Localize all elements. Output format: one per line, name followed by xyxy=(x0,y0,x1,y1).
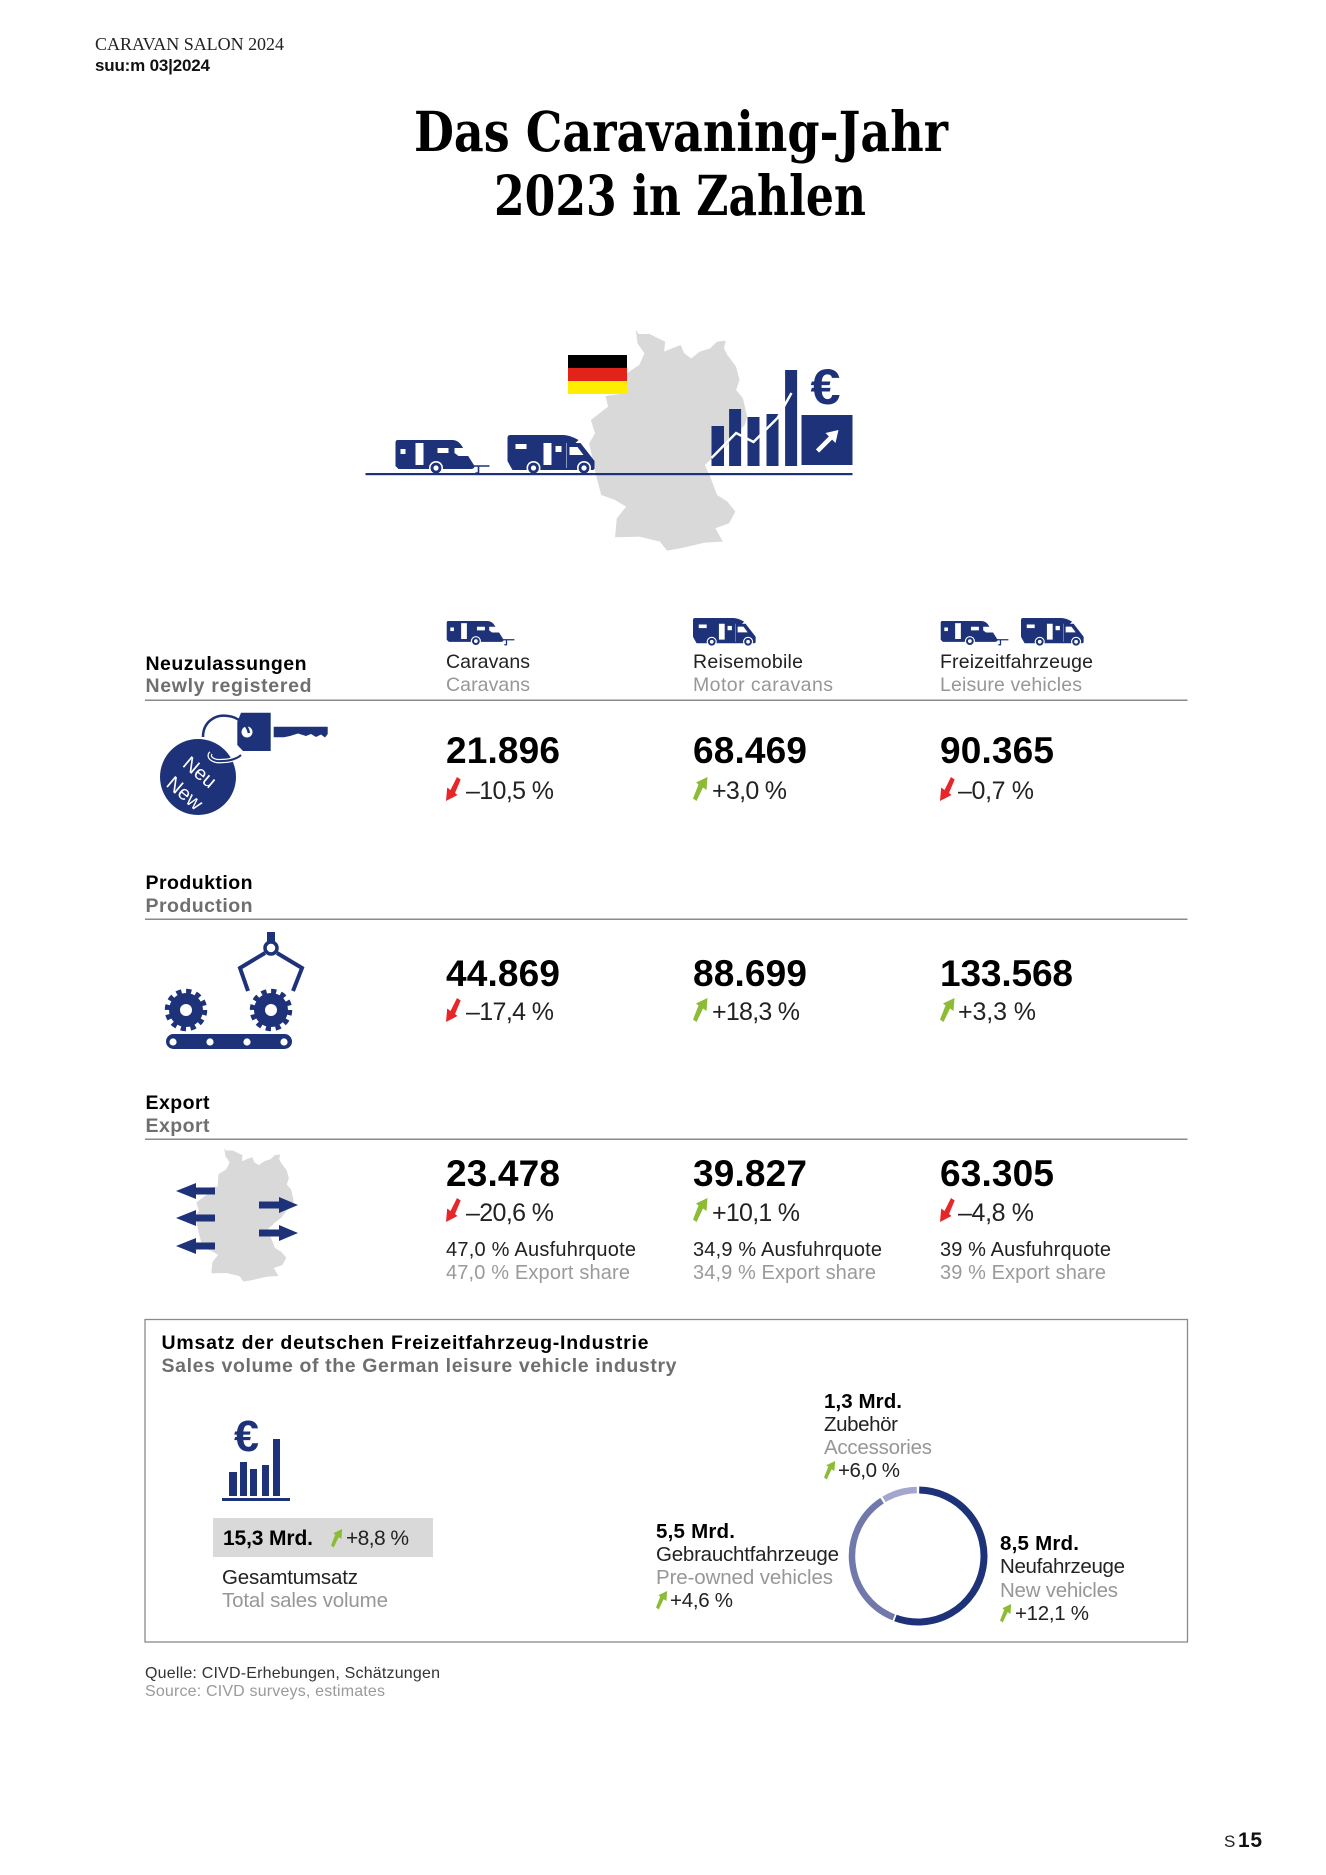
icon: production line with gears and gripper xyxy=(166,932,302,1049)
stat: motor caravans exported: 34,9 % Ausfuhrquote xyxy=(693,1239,882,1261)
stat: leisure vehicles exported: 39 % Export share xyxy=(940,1262,1106,1284)
stat: leisure vehicles exported: 63.305 xyxy=(940,1153,1054,1194)
icon: key with tag xyxy=(160,713,328,815)
label: pre-owned vehicles: 5,5 Mrd. xyxy=(656,1520,735,1543)
page number: 15 xyxy=(1238,1829,1262,1852)
donut chart xyxy=(852,1490,984,1622)
source note: Quelle: CIVD-Erhebungen, Schätzungen xyxy=(145,1665,440,1682)
stat: caravans exported: 47,0 % Ausfuhrquote xyxy=(446,1239,636,1261)
callout: total sales: 15,3 Mrd. xyxy=(223,1527,313,1550)
stat: motor caravans produced: 88.699 xyxy=(693,953,807,994)
heading: sales volume xyxy=(162,1332,677,1377)
stat: leisure vehicles exported: 39 % Ausfuhrquote xyxy=(940,1239,1111,1261)
title: Das Caravaning-Jahr xyxy=(414,99,949,164)
stat: motor caravans exported: 34,9 % Export share xyxy=(693,1262,876,1284)
column: motor caravans: Motor caravans xyxy=(693,674,833,696)
stat: caravans exported: –20,6 % xyxy=(466,1199,554,1227)
stat: motor caravans produced xyxy=(693,953,807,1026)
label: pre-owned vehicles: Gebrauchtfahrzeuge xyxy=(656,1543,839,1566)
stat: motor caravans produced: +18,3 % xyxy=(712,998,800,1026)
panel: newly registered xyxy=(145,653,1188,815)
label: pre-owned vehicles: Pre-owned vehicles xyxy=(656,1566,833,1589)
stat: caravans produced: –17,4 % xyxy=(466,998,554,1026)
source note: Source: CIVD surveys, estimates xyxy=(145,1683,385,1700)
icon: key with tag: Neu xyxy=(178,753,220,793)
heading: Export: Export xyxy=(146,1092,210,1114)
icon: euro bar chart xyxy=(222,1412,290,1501)
ground line xyxy=(366,473,852,475)
label: accessories xyxy=(824,1390,932,1482)
label: new vehicles: +12,1 % xyxy=(1015,1602,1089,1625)
icon: Germany with export arrows xyxy=(176,1148,298,1281)
panel: export xyxy=(145,1092,1188,1284)
column: caravans: Caravans xyxy=(446,674,530,696)
icon: bar chart with rising line and euro: € xyxy=(810,359,840,415)
column: caravans xyxy=(446,621,530,696)
stat: leisure vehicles exported xyxy=(940,1153,1111,1284)
stat: caravans registered xyxy=(446,730,560,805)
stat: leisure vehicles produced: +3,3 % xyxy=(958,998,1036,1026)
heading: Produktion xyxy=(146,872,252,917)
column: motor caravans: Reisemobile xyxy=(693,651,803,673)
heading: sales volume: Sales volume of the German leisure vehicle industry xyxy=(162,1355,677,1377)
label: new vehicles xyxy=(1000,1532,1125,1625)
icon: euro bar chart: € xyxy=(234,1412,259,1461)
header: issue line: suu:m 03|2024 xyxy=(95,56,211,75)
label: new vehicles: New vehicles xyxy=(1000,1579,1118,1602)
heading: Neuzulassungen: Neuzulassungen xyxy=(146,653,306,675)
stat: caravans exported xyxy=(446,1153,636,1284)
map of Germany xyxy=(589,330,747,551)
stat: caravans registered: 21.896 xyxy=(446,730,560,771)
stat: motor caravans registered: 68.469 xyxy=(693,730,807,771)
stat: leisure vehicles exported: –4,8 % xyxy=(958,1199,1034,1227)
heading: sales volume: Umsatz der deutschen Freizeitfahrzeug-Industrie xyxy=(162,1332,649,1354)
heading: Neuzulassungen xyxy=(146,653,312,697)
column: leisure vehicles xyxy=(940,618,1093,696)
stat: motor caravans registered xyxy=(693,730,807,805)
heading: Produktion: Produktion xyxy=(146,872,252,894)
icon: bar chart with rising line and euro xyxy=(712,359,852,466)
German flag xyxy=(568,355,627,394)
panel: sales volume box xyxy=(145,1320,1188,1642)
icon: motor caravan xyxy=(508,435,594,475)
label: accessories: 1,3 Mrd. xyxy=(824,1390,902,1413)
panel: production xyxy=(145,872,1188,1049)
label: pre-owned vehicles: +4,6 % xyxy=(670,1589,733,1612)
heading: Neuzulassungen: Newly registered xyxy=(146,675,312,697)
icon: key with tag: New xyxy=(162,772,207,815)
stat: leisure vehicles registered: –0,7 % xyxy=(958,777,1034,805)
stat: caravans produced xyxy=(446,953,560,1026)
page number: S xyxy=(1224,1832,1235,1851)
column: motor caravans xyxy=(693,618,833,696)
page number xyxy=(1224,1829,1262,1852)
stat: motor caravans exported xyxy=(693,1153,882,1284)
stat: motor caravans exported: +10,1 % xyxy=(712,1199,800,1227)
column: caravans: Caravans xyxy=(446,651,530,673)
stat: leisure vehicles produced xyxy=(940,953,1073,1026)
hero illustration: Germany, vehicles and chart xyxy=(366,330,852,551)
stat: caravans exported: 23.478 xyxy=(446,1153,560,1194)
column: leisure vehicles: Leisure vehicles xyxy=(940,674,1082,696)
column: leisure vehicles: Freizeitfahrzeuge xyxy=(940,651,1093,673)
header: issue line: CARAVAN SALON 2024 xyxy=(95,34,284,54)
stat: caravans registered: –10,5 % xyxy=(466,777,554,805)
heading: Export: Export xyxy=(146,1115,210,1137)
header: issue line xyxy=(95,34,284,75)
stat: leisure vehicles produced: 133.568 xyxy=(940,953,1073,994)
heading: Export xyxy=(146,1092,210,1137)
label: new vehicles: Neufahrzeuge xyxy=(1000,1555,1125,1578)
callout: total sales: Gesamtumsatz xyxy=(222,1566,358,1589)
source note xyxy=(145,1665,440,1700)
callout: total sales: Total sales volume xyxy=(222,1589,388,1612)
label: accessories: Zubehör xyxy=(824,1413,898,1436)
callout: total sales: +8,8 % xyxy=(346,1527,409,1550)
label: new vehicles: 8,5 Mrd. xyxy=(1000,1532,1079,1555)
panel: column headers xyxy=(446,618,1093,696)
stat: motor caravans exported: 39.827 xyxy=(693,1153,807,1194)
title xyxy=(414,99,949,228)
label: accessories: Accessories xyxy=(824,1436,932,1459)
callout: total sales xyxy=(213,1518,433,1612)
stat: leisure vehicles registered: 90.365 xyxy=(940,730,1054,771)
title: 2023 in Zahlen xyxy=(494,163,866,228)
label: accessories: +6,0 % xyxy=(838,1459,900,1482)
stat: caravans produced: 44.869 xyxy=(446,953,560,994)
label: pre-owned vehicles xyxy=(656,1520,839,1612)
icon: caravan xyxy=(396,440,490,475)
heading: Produktion: Production xyxy=(146,895,252,917)
stat: caravans exported: 47,0 % Export share xyxy=(446,1262,630,1284)
stat: leisure vehicles registered xyxy=(940,730,1054,805)
stat: motor caravans registered: +3,0 % xyxy=(712,777,787,805)
